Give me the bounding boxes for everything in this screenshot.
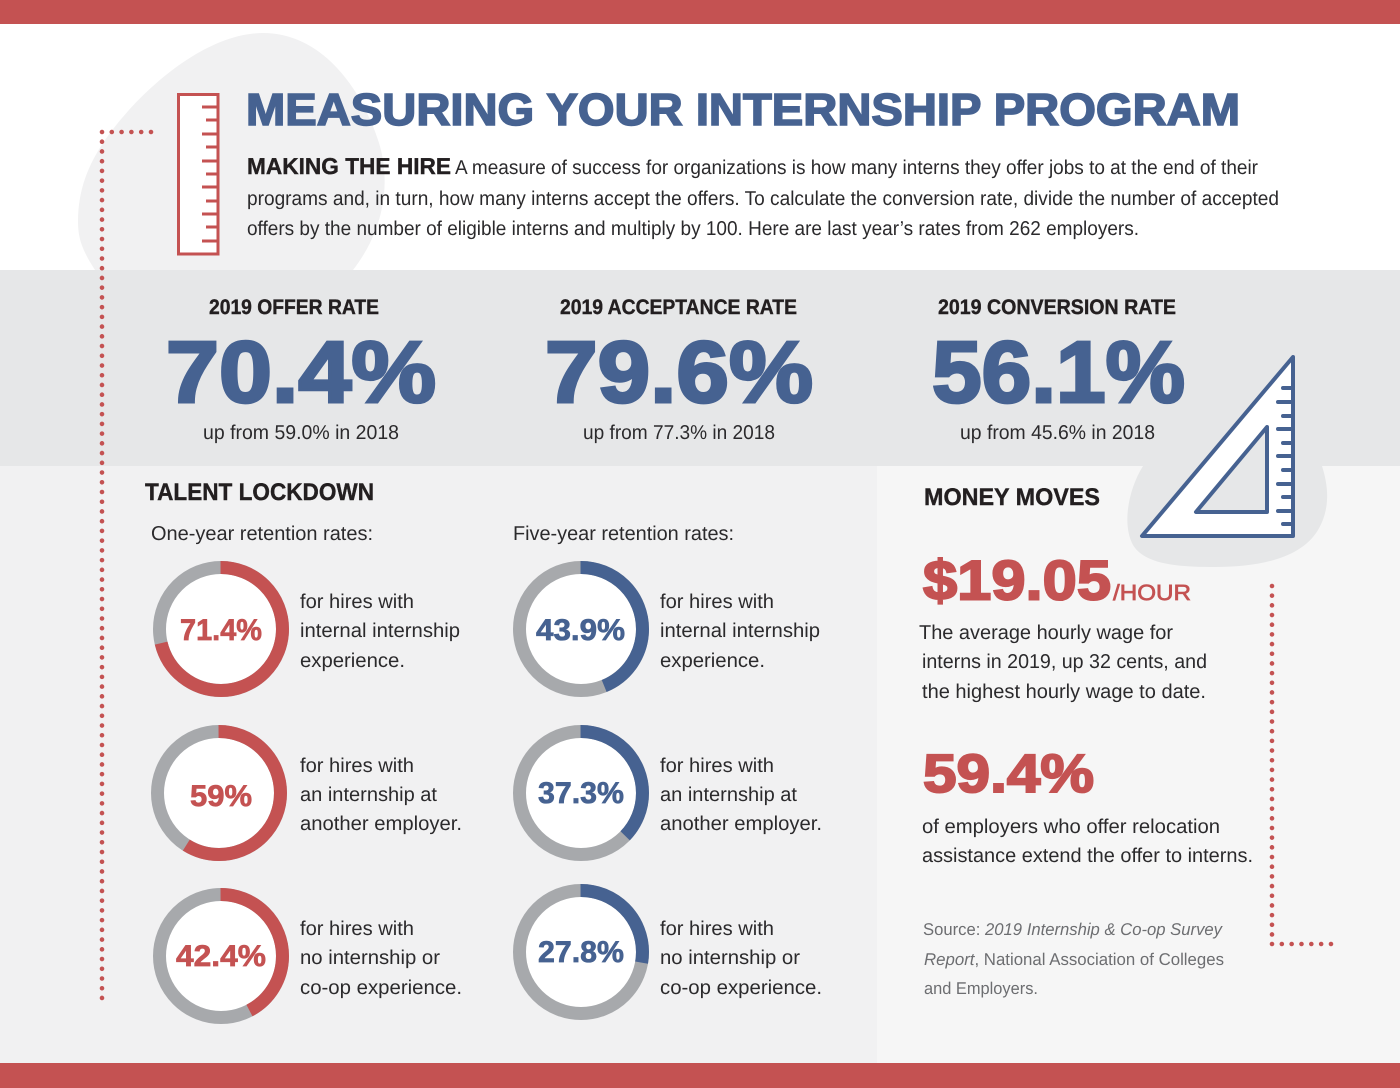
dotted line: left [102,132,151,998]
label: internal one-year: internal internship [300,620,460,642]
donut: five-year other employer 37.3%: 37.3% [538,777,624,810]
text: relocation description [922,816,1253,867]
text: hourly wage description: interns in 2019, up 32 cents, and [922,651,1207,673]
text: hourly wage description: The average hourly wage for [919,622,1173,644]
subheading: five-year: Five-year retention rates: [513,523,734,545]
stat: conversion rate [932,296,1185,444]
source note [923,920,1224,998]
label: none five-year: no internship or [660,947,800,969]
icon: ruler [178,94,218,254]
stat: offer rate: 2019 OFFER RATE [209,296,379,319]
donut: one-year other employer 59% [158,732,280,854]
triangle backdrop blob [1127,466,1327,567]
panel: money moves background [877,466,1400,1063]
heading: money moves: MONEY MOVES [924,484,1100,511]
bottom bar [0,1063,1400,1088]
label: none one-year [300,918,462,999]
dotted line: right [1272,586,1331,944]
header blob [78,33,385,270]
text: relocation description: assistance extend the offer to interns. [922,845,1253,867]
title: MEASURING YOUR INTERNSHIP PROGRAM [246,84,1240,135]
stat: hourly wage: $19.05 [923,548,1111,612]
donut: one-year none 42.4%: 42.4% [176,940,266,973]
stat: offer rate [166,296,436,444]
intro text [247,153,1279,240]
donut: five-year none 27.8%: 27.8% [538,936,624,969]
label: internal one-year: for hires with [300,591,414,613]
label: internal five-year: experience. [660,650,765,672]
text: hourly wage description [919,622,1207,703]
label: other employer five-year: another employer. [660,813,822,835]
stat: offer rate: 70.4% [166,324,436,421]
source note: Report, National Association of Colleges [924,950,1224,969]
label: other employer five-year [660,755,822,835]
label: none one-year: co-op experience. [300,977,462,999]
donut: five-year other employer 37.3% [520,732,642,854]
label: internal five-year [660,591,820,672]
panel: talent lockdown background [0,466,877,1063]
label: internal one-year [300,591,460,672]
label: none five-year [660,918,822,999]
intro subheading: MAKING THE HIRE [247,153,451,179]
stat: offer rate: up from 59.0% in 2018 [203,422,399,444]
label: internal one-year: experience. [300,650,405,672]
label: none one-year: no internship or [300,947,440,969]
source note: and Employers. [924,979,1038,998]
donut: five-year none 27.8% [520,890,642,1014]
stat: relocation: 59.4% [923,744,1094,804]
donut: one-year none 42.4% [160,894,282,1018]
label: none five-year: for hires with [660,918,774,940]
stat: acceptance rate: 2019 ACCEPTANCE RATE [560,296,797,319]
stat: conversion rate: 56.1% [932,324,1185,421]
donut: five-year internal 43.9%: 43.9% [536,614,625,647]
top bar [0,0,1400,24]
stat: hourly wage: /HOUR [1113,580,1191,605]
label: none one-year: for hires with [300,918,414,940]
stats band [0,270,1400,466]
label: none five-year: co-op experience. [660,977,822,999]
donut: five-year internal 43.9% [520,568,642,690]
text: relocation description: of employers who offer relocation [922,816,1220,838]
stat: hourly wage [923,548,1191,612]
label: other employer five-year: an internship at [660,784,797,806]
label: other employer five-year: for hires with [660,755,774,777]
label: other employer one-year: for hires with [300,755,414,777]
label: other employer one-year [300,755,462,835]
label: other employer one-year: another employer. [300,813,462,835]
intro line 1: A measure of success for organizations is how many interns they offer jobs to at the end of their [455,157,1258,179]
donut: one-year other employer 59%: 59% [190,780,252,813]
stat: acceptance rate: 79.6% [545,324,813,421]
label: internal five-year: for hires with [660,591,774,613]
stat: conversion rate: 2019 CONVERSION RATE [938,296,1176,319]
stat: conversion rate: up from 45.6% in 2018 [960,422,1155,444]
stat: acceptance rate: up from 77.3% in 2018 [583,422,775,444]
intro line 3: offers by the number of eligible interns and multiply by 100. Here are last year’s rates from 262 employers. [247,218,1139,240]
intro line 2: programs and, in turn, how many interns accept the offers. To calculate the conversion rate, divide the number of accepted [247,188,1279,210]
text: hourly wage description: the highest hourly wage to date. [922,681,1206,703]
label: other employer one-year: an internship at [300,784,437,806]
source note: Source: 2019 Internship & Co-op Survey [923,920,1223,939]
heading: talent lockdown: TALENT LOCKDOWN [145,479,374,506]
donut: one-year internal 71.4%: 71.4% [180,614,262,647]
donut: one-year internal 71.4% [160,568,282,690]
stat: acceptance rate [545,296,813,444]
subheading: one-year: One-year retention rates: [151,523,373,545]
label: internal five-year: internal internship [660,620,820,642]
icon: set square [1142,357,1293,536]
